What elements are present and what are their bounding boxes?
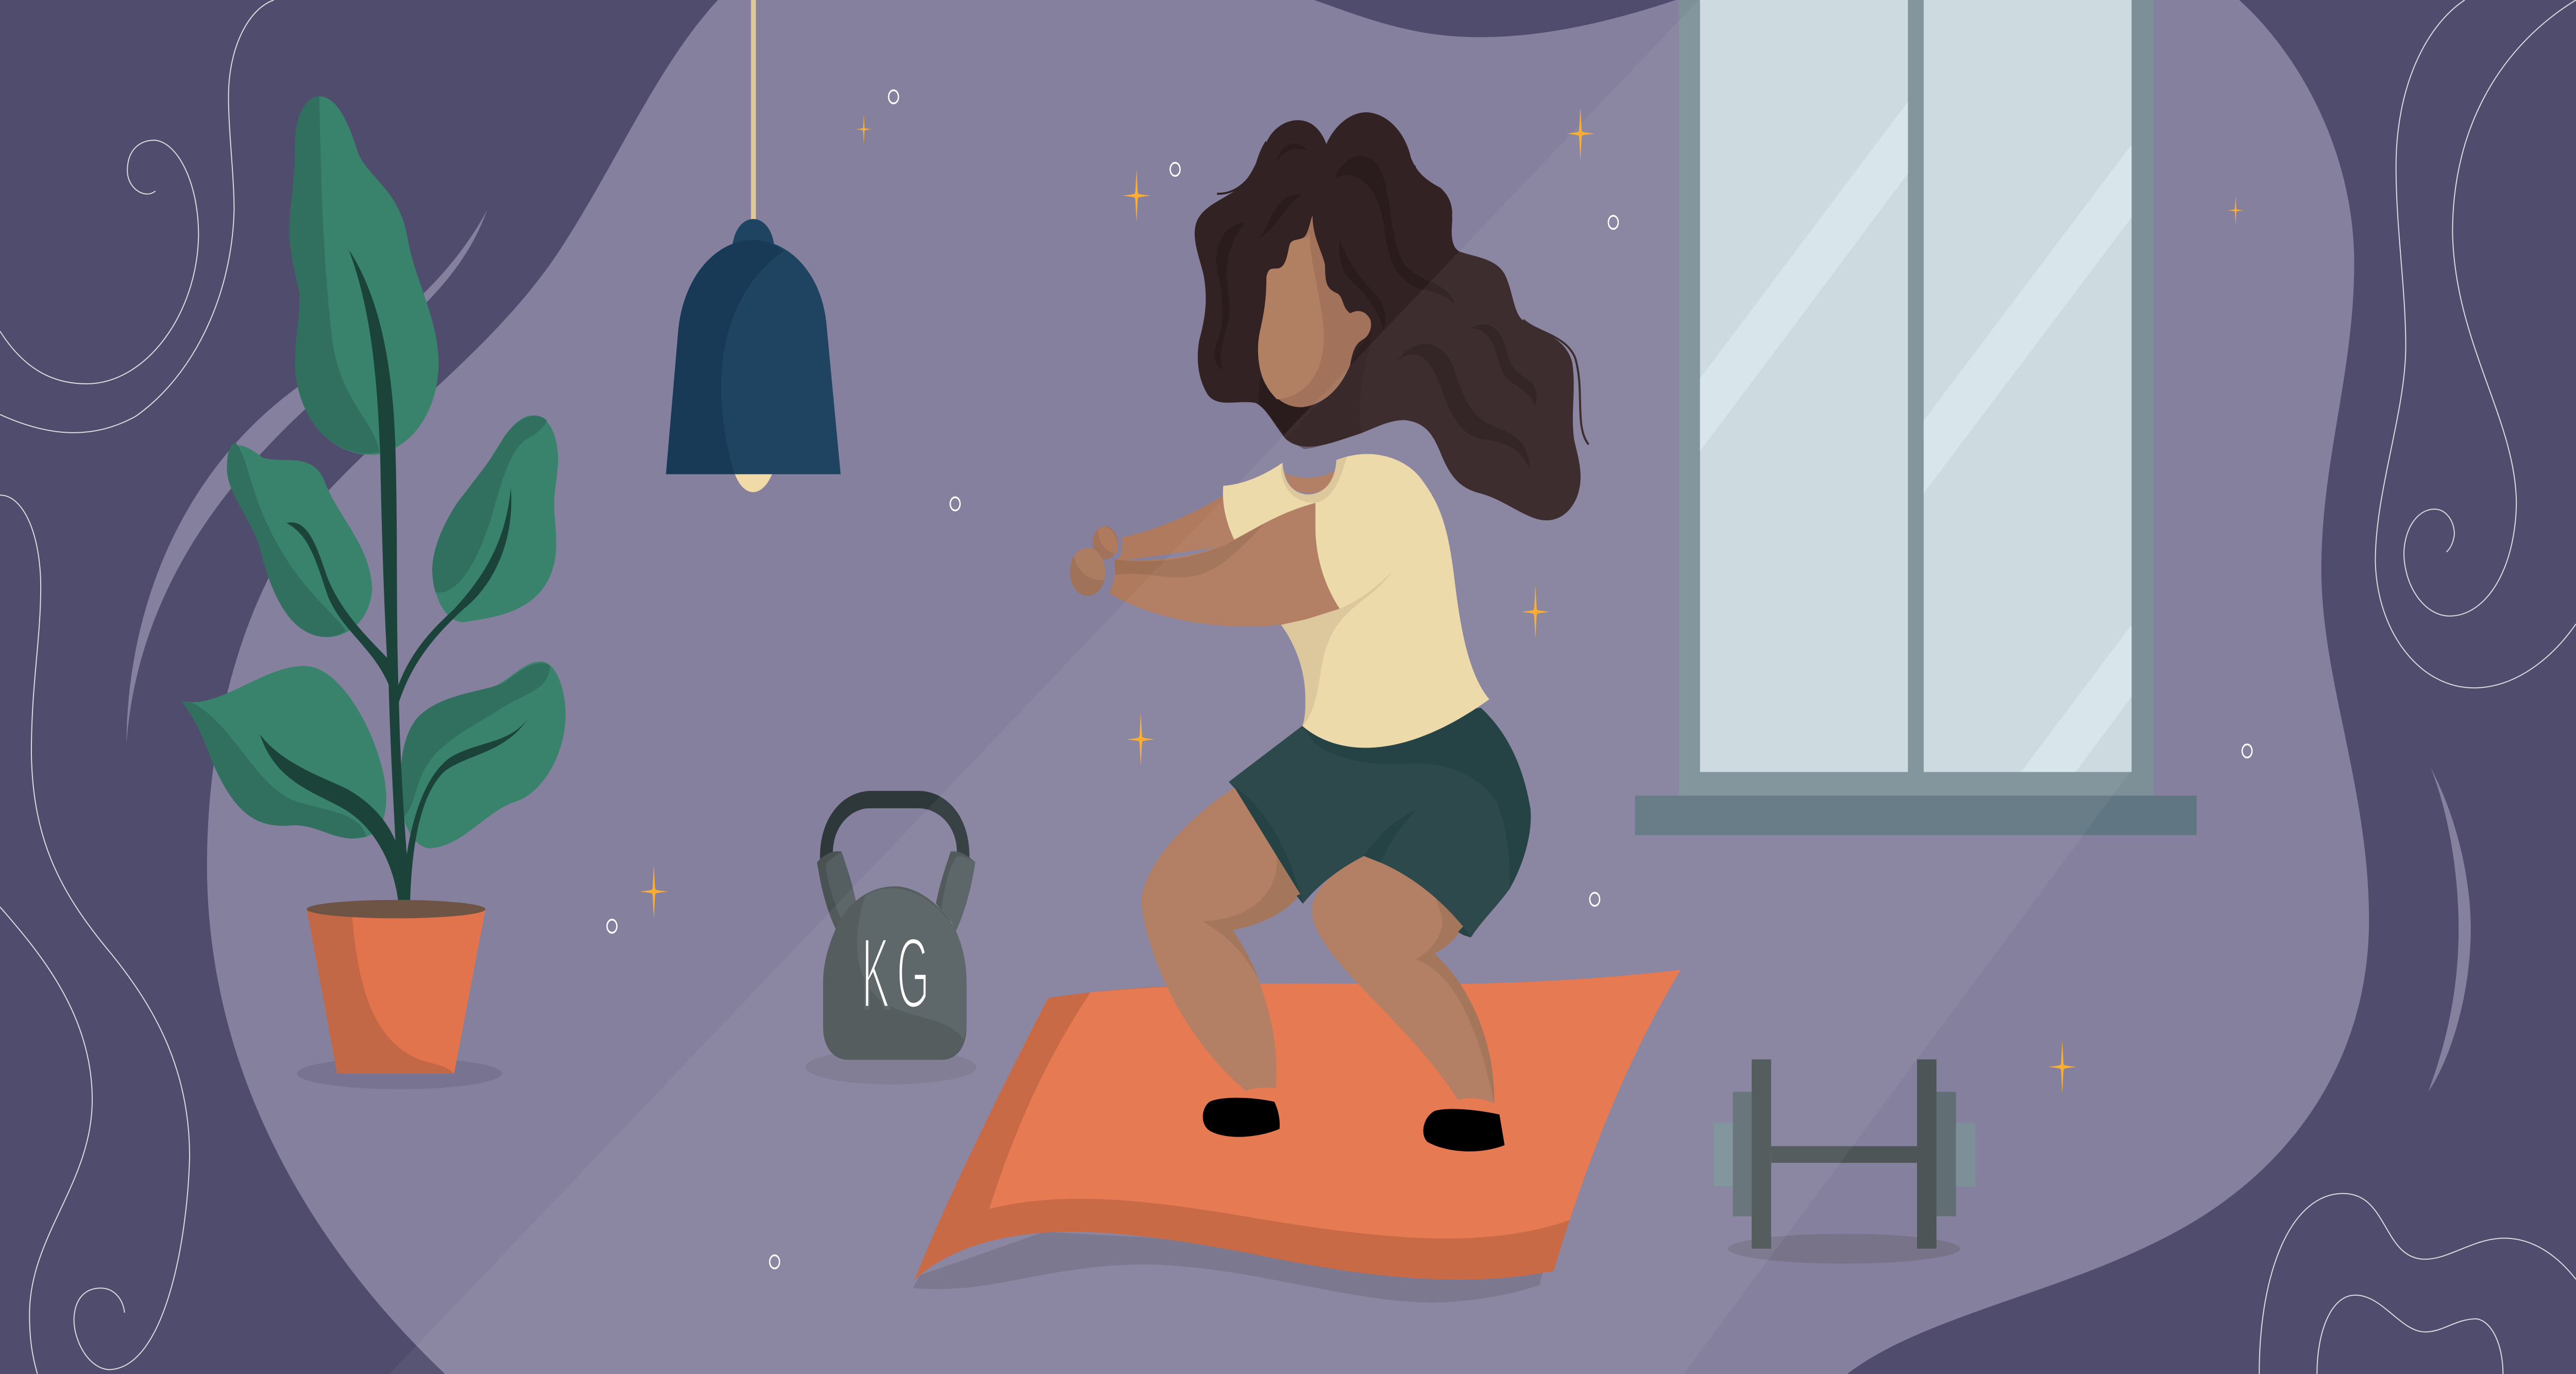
hair curl shadows — [1214, 143, 1537, 468]
neck — [1284, 470, 1336, 493]
woman upper body — [1070, 112, 1588, 748]
face highlight — [1258, 234, 1324, 399]
dumbbell collars and bar — [1752, 1059, 1937, 1249]
background: swirl lines left — [0, 0, 274, 1374]
mat shadow — [913, 1232, 1544, 1302]
shorts — [1229, 708, 1531, 937]
near hand — [1070, 548, 1105, 596]
kettlebell highlight — [857, 888, 967, 1040]
right shoe — [1423, 1109, 1504, 1151]
window sill — [1635, 795, 2197, 835]
t-shirt — [1223, 454, 1489, 748]
window — [1635, 0, 2197, 835]
dumbbell outer plates — [1714, 1123, 1975, 1186]
top leaf — [290, 96, 439, 455]
background: crescent swoosh behind plant — [126, 210, 487, 743]
arm shadow — [1114, 523, 1264, 578]
left shoe — [1203, 1098, 1280, 1137]
small white rings — [607, 90, 2252, 1268]
mat underside — [914, 970, 1681, 1280]
left leg — [1141, 787, 1300, 1091]
glass reflections — [1700, 101, 2131, 772]
kettlebell — [806, 791, 976, 1084]
far arm — [1117, 486, 1256, 562]
lamp cord — [751, 0, 756, 224]
kettlebell handle — [820, 791, 970, 860]
lamp shade — [666, 240, 841, 474]
flyaway hair strands — [1217, 142, 1588, 445]
woman lower body — [1141, 708, 1531, 1104]
dumbbell — [1714, 1059, 1975, 1264]
kettlebell shadow — [806, 1049, 976, 1084]
shoes — [1203, 1098, 1504, 1151]
pot — [307, 900, 485, 1074]
lower right leaf — [400, 661, 566, 848]
lamp cap — [732, 219, 774, 247]
pendant lamp — [666, 0, 841, 492]
mat top — [989, 970, 1681, 1239]
upper right leaf — [432, 415, 558, 622]
near arm — [1109, 503, 1340, 626]
kettlebell label: K — [862, 917, 890, 1029]
kettlebell handle arms — [817, 851, 975, 931]
right leg — [1312, 856, 1494, 1104]
yoga mat — [913, 970, 1681, 1302]
background: swirl lines right — [2259, 0, 2576, 1374]
lamp shade shadow — [666, 240, 784, 474]
light beam overlay — [388, 0, 2131, 1374]
shirt fold shadow — [1281, 572, 1392, 726]
upper left leaf — [227, 443, 372, 637]
dumbbell shadow — [1728, 1234, 1960, 1264]
hair — [1195, 112, 1581, 520]
face and ear — [1258, 215, 1371, 407]
lower left leaf — [181, 666, 386, 839]
sparkles — [639, 107, 2244, 1093]
collar shadow — [1281, 457, 1347, 503]
window frame — [1679, 0, 2154, 795]
pot shadow — [297, 1058, 502, 1089]
potted plant — [181, 96, 566, 1089]
window panes — [1700, 0, 2131, 772]
far hand — [1093, 527, 1117, 559]
plant stem and veins — [260, 250, 529, 900]
light bulb — [734, 470, 774, 492]
dumbbell inner plates — [1733, 1092, 1956, 1216]
kettlebell body — [823, 886, 967, 1060]
kettlebell label: G — [896, 917, 929, 1029]
